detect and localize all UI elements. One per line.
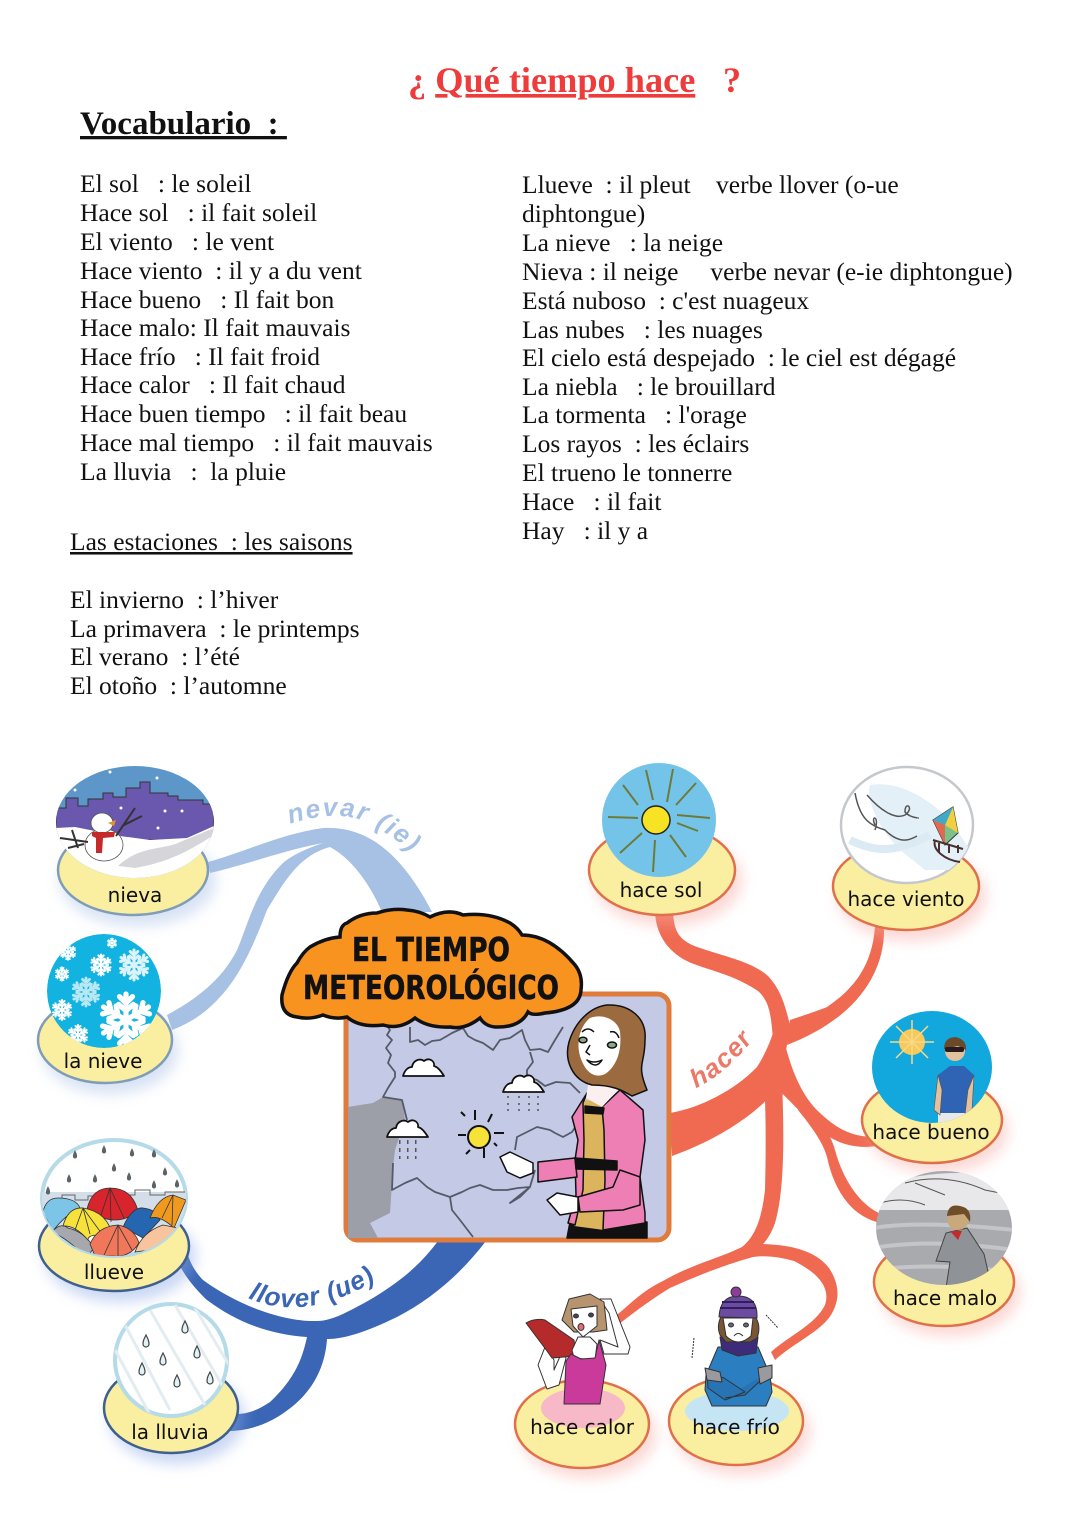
- disc: [833, 842, 979, 930]
- disc: [39, 1201, 189, 1291]
- text block: seasons: El verano : l’été: [70, 642, 240, 671]
- label: llueve: [84, 1260, 144, 1284]
- disc: [104, 1363, 238, 1453]
- belt: [575, 1158, 617, 1170]
- branch: hace bueno: [775, 1040, 877, 1147]
- node: nieva: [56, 766, 216, 926]
- icon: kite in wind: [841, 767, 973, 883]
- face: [578, 1016, 620, 1076]
- text block: seasons: La primavera : le printemps: [70, 614, 360, 643]
- label: la nieve: [64, 1049, 142, 1073]
- node: la nieve: [38, 934, 178, 1094]
- text block: vocabulary left column: [80, 169, 433, 486]
- face: [571, 1306, 597, 1337]
- label: hace frío: [692, 1415, 780, 1439]
- text block: vocabulary right column: La nieve : la neige: [522, 228, 723, 257]
- jacket right side: [602, 1090, 645, 1230]
- disc: [862, 1077, 1002, 1163]
- disc: [515, 1380, 649, 1468]
- branches: hacer: [613, 912, 884, 1360]
- heading: vocabulario: Vocabulario :: [80, 106, 287, 142]
- text block: vocabulary right column: diphtongue): [522, 199, 645, 228]
- text block: vocabulary left column: Hace calor : Il fait chaud: [80, 370, 346, 399]
- branch: nevar: [167, 828, 432, 1030]
- disc: [669, 1377, 803, 1465]
- central panel: weather presenter map: [346, 994, 669, 1240]
- icon: man in sun: [872, 1011, 992, 1125]
- text block: vocabulary right column: Los rayos : les éclairs: [522, 429, 749, 458]
- map background: [346, 994, 669, 1240]
- fan: [526, 1319, 576, 1358]
- disc: [589, 825, 735, 915]
- label: la lluvia: [131, 1420, 209, 1444]
- upper arm: [538, 1158, 577, 1182]
- text block: vocabulary left column: Hace sol : il fait soleil: [80, 198, 317, 227]
- icon: umbrellas in rain: [40, 1140, 190, 1258]
- icon: rain marks: [399, 1096, 539, 1159]
- cloud text: [303, 930, 559, 1007]
- disc: [38, 997, 172, 1083]
- icon: man in bad weather: [874, 1170, 1014, 1288]
- text block: vocabulary left column: El sol : le soleil: [80, 169, 251, 198]
- label: nieva: [108, 883, 162, 907]
- node: hace sol: [589, 763, 742, 926]
- text block: vocabulary right column: La tormenta : l'orage: [522, 400, 747, 429]
- left arm: [538, 1347, 566, 1389]
- text block: vocabulary left column: Hace viento : il y a du vent: [80, 256, 362, 285]
- text block: vocabulary right column: Llueve : il pleut verbe llover (o-ue: [522, 170, 899, 199]
- icon: snowflakes: [47, 934, 161, 1048]
- node: hace frío: [669, 1287, 810, 1475]
- label: nevar (ie): [289, 802, 422, 852]
- cloud shape: [282, 909, 581, 1028]
- text block: vocabulary right column: Está nuboso : c'est nuageux: [522, 286, 809, 315]
- cloud text: EL TIEMPO: [352, 930, 510, 969]
- title: ?: [723, 60, 741, 100]
- text block: vocabulary left column: El viento : le vent: [80, 227, 274, 256]
- disc: [58, 825, 208, 915]
- cloud title: [282, 909, 581, 1028]
- weather icons: [403, 1059, 444, 1076]
- text block: vocabulary right column: El cielo está despejado : le ciel est dégagé: [522, 343, 956, 372]
- icon: hot woman with fan: [526, 1294, 630, 1428]
- branch: hace malo: [798, 1105, 881, 1223]
- hands: [500, 1152, 533, 1178]
- text block: vocabulary right column: El trueno le tonnerre: [522, 458, 732, 487]
- disc: [874, 1238, 1014, 1326]
- icon: sun: [458, 1110, 504, 1158]
- text block: vocabulary right column: Hace : il fait: [522, 487, 661, 516]
- node: hace calor: [515, 1294, 656, 1478]
- label: hacer: [690, 1030, 749, 1088]
- grey region: [348, 1097, 405, 1238]
- icon: cold girl in coat: [685, 1287, 789, 1431]
- label: llover (ue): llover (ue): [248, 1266, 374, 1308]
- text block: vocabulary left column: Hace mal tiempo : il fait mauvais: [80, 428, 433, 457]
- node: hace malo: [874, 1170, 1020, 1336]
- map borders: [383, 1023, 580, 1237]
- node: hace viento: [833, 767, 986, 941]
- text block: vocabulary right column: Nieva : il neige verbe nevar (e-ie diphtongue): [522, 257, 1013, 286]
- label: hace malo: [893, 1286, 997, 1310]
- chest: [572, 1337, 597, 1360]
- text block: vocabulary left column: Hace bueno : Il fait bon: [80, 285, 334, 314]
- cloud text: METEOROLÓGICO: [303, 967, 559, 1007]
- icon: sun: [602, 763, 716, 877]
- node: llueve: [39, 1140, 196, 1302]
- jacket left side: [568, 1093, 587, 1225]
- heading: las estaciones: Las estaciones : les saisons: [70, 527, 353, 556]
- shirt: [574, 1100, 604, 1230]
- skirt: [567, 1222, 647, 1238]
- label: hace sol: [620, 878, 702, 902]
- label: hace calor: [530, 1415, 635, 1439]
- tank: [564, 1340, 606, 1404]
- label: hace bueno: [872, 1120, 990, 1144]
- hair: [562, 1294, 607, 1332]
- text block: vocabulary left column: La lluvia : la pluie: [80, 457, 286, 486]
- text block: seasons: El invierno : l’hiver: [70, 585, 279, 614]
- right arm: [600, 1299, 630, 1354]
- branch: trunk: [670, 1025, 790, 1156]
- icon: raindrops: [115, 1304, 232, 1416]
- text block: vocabulary left column: Hace frío : Il fait froid: [80, 342, 320, 371]
- node: hace bueno: [862, 1011, 1008, 1173]
- title: ¿ Qué tiempo hace: [408, 60, 695, 100]
- lower arm: [578, 1170, 640, 1212]
- text block: seasons: [70, 585, 360, 700]
- label: nevar (ie): nevar (ie): [289, 802, 422, 852]
- text block: vocabulary right column: Hay : il y a: [522, 516, 648, 545]
- branch: llover: [180, 1241, 486, 1431]
- text block: vocabulary left column: Hace buen tiempo : il fait beau: [80, 399, 407, 428]
- branch: hace sol: [655, 912, 790, 1040]
- node: la lluvia: [104, 1304, 245, 1464]
- icon: snow scene: [56, 766, 216, 880]
- text block: vocabulary right column: Las nubes : les nuages: [522, 315, 763, 344]
- text block: vocabulary left column: Hace malo: Il fait mauvais: [80, 313, 350, 342]
- figure: presenter: [500, 1005, 647, 1238]
- label: hacer: hacer: [690, 1030, 749, 1088]
- neck: [586, 1072, 618, 1107]
- hair: [568, 1005, 647, 1096]
- label: hace viento: [847, 887, 965, 911]
- branch: hace viento: [787, 927, 884, 1045]
- text block: vocabulary right column: La niebla : le brouillard: [522, 372, 776, 401]
- branch: calor and frio: [613, 1080, 838, 1360]
- text block: vocabulary right column: [522, 170, 1013, 545]
- text block: seasons: El otoño : l’automne: [70, 671, 287, 700]
